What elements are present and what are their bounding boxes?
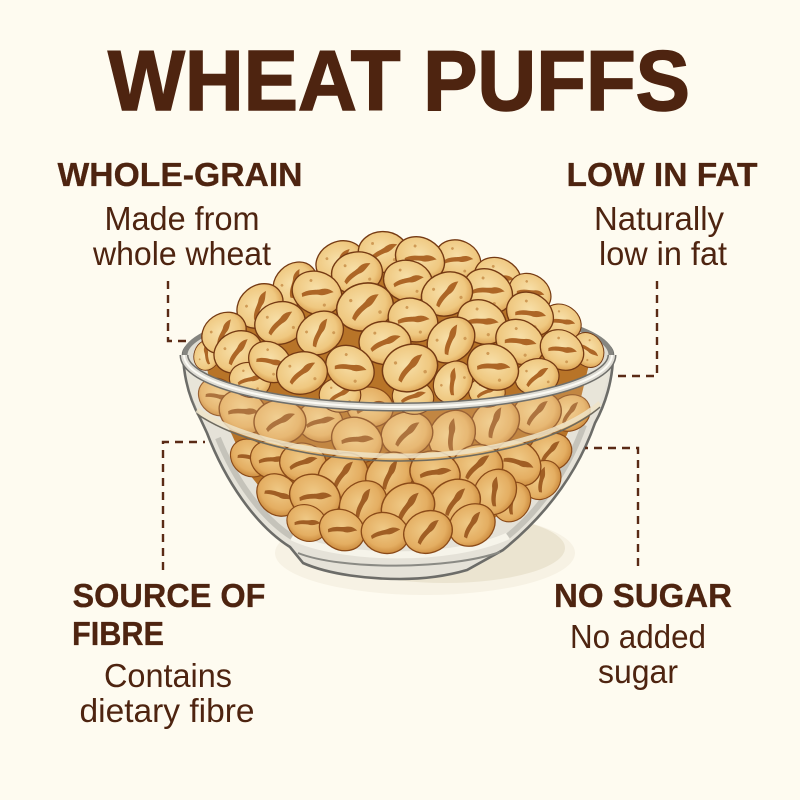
title: WHEAT PUFFS (108, 34, 690, 129)
dashed leader: low in fat (612, 281, 657, 376)
callout: no sugar (554, 577, 732, 690)
front rim (184, 355, 612, 407)
text: sugar: sugar (598, 653, 678, 690)
bowl inner bands (218, 425, 584, 566)
callout: whole-grain (58, 156, 302, 272)
dashed leader: no sugar (585, 448, 638, 566)
puff mass backing (205, 250, 592, 542)
text: low in fat: low in fat (599, 235, 727, 272)
pile of puffs above rim (190, 228, 610, 418)
text: no added: No added (570, 618, 706, 655)
callout: source of fibre (72, 577, 266, 729)
text: naturally: Naturally (594, 200, 724, 237)
back rim (185, 305, 611, 405)
text: whole wheat: whole wheat (92, 235, 271, 272)
text: made from: Made from (104, 200, 260, 237)
heading: source of: SOURCE OF (72, 577, 266, 614)
heading: low in fat: LOW IN FAT (566, 156, 758, 193)
dashed leader: whole-grain (168, 281, 186, 341)
heading: whole-grain: WHOLE-GRAIN (58, 156, 302, 193)
bowl glass body (183, 314, 613, 579)
heading: no sugar: NO SUGAR (554, 577, 732, 614)
text: dietary fibre: dietary fibre (80, 692, 254, 729)
text: contains: Contains (104, 657, 232, 694)
dashed leader: source of fibre (163, 442, 205, 570)
callout: low in fat (566, 156, 758, 272)
collar band (197, 403, 600, 461)
shadow under bowl (275, 511, 575, 595)
glass collar overlay (185, 360, 611, 458)
bowl with wheat puffs (183, 228, 613, 579)
heading: fibre: FIBRE (72, 615, 164, 652)
lower puffs (191, 370, 596, 560)
